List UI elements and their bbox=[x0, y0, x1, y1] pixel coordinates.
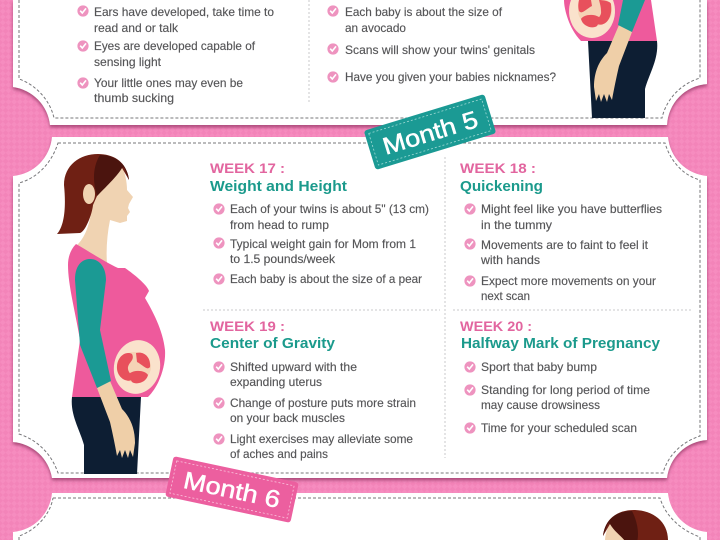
text block: month 4 right column bbox=[327, 5, 556, 84]
section: week 19: of aches and pains bbox=[230, 447, 328, 461]
section: week 17: Each of your twins is about 5" (13 cm) bbox=[230, 202, 429, 216]
section: week 18: Might feel like you have butterflies bbox=[481, 202, 662, 216]
figure: pregnant woman lower body, month 4 bbox=[564, 0, 657, 118]
section: week 18: in the tummy bbox=[481, 218, 552, 232]
figure: pregnant woman, month 5 bbox=[57, 154, 165, 474]
section: week 20: Halfway Mark of Pregnancy bbox=[461, 336, 660, 352]
section: week 20: may cause drowsiness bbox=[481, 398, 600, 412]
text block: month 4 left column: sensing light bbox=[94, 55, 162, 69]
section: week 17 bbox=[210, 160, 429, 286]
panel: month 5 bbox=[13, 137, 707, 478]
panel: month 4 continuation bbox=[13, 0, 707, 125]
section: week 19: on your back muscles bbox=[230, 411, 345, 425]
section: week 17: Typical weight gain for Mom from 1 bbox=[230, 237, 416, 251]
figure: woman head, month 6 bbox=[603, 510, 668, 540]
section: week 20: Standing for long period of time bbox=[481, 383, 650, 397]
text block: month 4 left column: read and or talk bbox=[94, 21, 179, 35]
section: week 17: Each baby is about the size of a pear bbox=[230, 272, 422, 286]
badge: Month 6 bbox=[165, 456, 299, 523]
section: week 18: with hands bbox=[480, 253, 540, 267]
badge: Month 5 bbox=[364, 94, 496, 170]
section: week 18 bbox=[460, 160, 662, 303]
text block: month 4 right column: Have you given your babies nicknames? bbox=[345, 70, 556, 84]
section: week 19: Light exercises may alleviate some bbox=[230, 432, 413, 446]
panel: month 6 bbox=[13, 493, 707, 540]
section: week 17: from head to rump bbox=[230, 218, 329, 232]
section: week 19: expanding uterus bbox=[230, 375, 322, 389]
section: week 20: Time for your scheduled scan bbox=[481, 421, 637, 435]
section: week 17: WEEK 17 : bbox=[210, 160, 285, 176]
section: week 18: Expect more movements on your bbox=[481, 274, 656, 288]
section: week 18: next scan bbox=[481, 289, 530, 303]
section: week 17: to 1.5 pounds/week bbox=[230, 252, 336, 266]
text block: month 4 left column: thumb sucking bbox=[94, 91, 174, 105]
section: week 18: Movements are to faint to feel it bbox=[481, 238, 649, 252]
text block: month 4 left column: Ears have developed, take time to bbox=[94, 5, 274, 19]
section: week 19 bbox=[210, 318, 416, 461]
section: week 18: WEEK 18 : bbox=[460, 160, 536, 176]
text block: month 4 left column bbox=[77, 5, 274, 105]
section: week 18: Quickening bbox=[460, 179, 543, 195]
text block: month 4 left column: Your little ones may even be bbox=[94, 76, 243, 90]
section: week 19: Shifted upward with the bbox=[230, 360, 357, 374]
text block: month 4 right column: an avocado bbox=[345, 21, 406, 35]
text block: month 4 left column: Eyes are developed capable of bbox=[94, 39, 256, 53]
text block: month 4 right column: Scans will show your twins' genitals bbox=[345, 43, 535, 57]
section: week 20: WEEK 20 : bbox=[460, 318, 532, 334]
section: week 19: Center of Gravity bbox=[210, 336, 335, 352]
section: week 19: Change of posture puts more strain bbox=[230, 396, 416, 410]
section: week 17: Weight and Height bbox=[210, 179, 347, 195]
section: week 19: WEEK 19 : bbox=[210, 318, 285, 334]
text block: month 4 right column: Each baby is about the size of bbox=[345, 5, 503, 19]
badge: Month 5: Month 5 bbox=[380, 106, 481, 161]
badge: Month 6: Month 6 bbox=[181, 467, 283, 514]
section: week 20: Sport that baby bump bbox=[481, 360, 597, 374]
section: week 20 bbox=[460, 318, 660, 435]
